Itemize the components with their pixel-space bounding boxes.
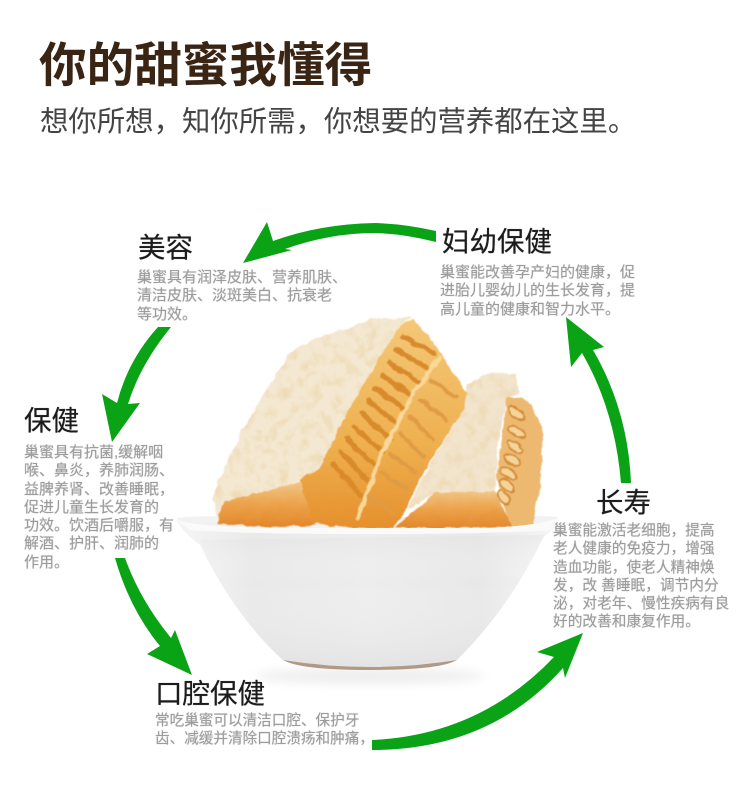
left comb: white top xyxy=(212,317,413,523)
bowl foot xyxy=(283,660,457,670)
heading: 长寿: 长寿 xyxy=(596,487,651,518)
arrow: 口腔保健 to 长寿 xyxy=(372,633,583,750)
left comb: ribs xyxy=(333,337,433,495)
arrow: 长寿 to 妇幼保健 xyxy=(566,317,631,483)
right comb: cell scallops xyxy=(495,404,527,506)
subtitle: 想你所想，知你所需，你想要的营养都在这里。 xyxy=(40,106,636,138)
left comb: ridge xyxy=(357,355,441,520)
panel: 长寿 xyxy=(553,487,729,630)
left comb: orange side xyxy=(300,318,467,529)
heading: 口腔保健: 口腔保健 xyxy=(155,678,265,709)
heading: 妇幼保健: 妇幼保健 xyxy=(442,226,552,257)
left comb: second rib column xyxy=(370,380,457,513)
bowl back rim xyxy=(176,516,558,530)
arrow: 保健 to 口腔保健 xyxy=(115,558,192,675)
bowl shadow xyxy=(255,668,485,684)
arrow: 美容 to 保健 xyxy=(102,327,171,442)
text: 妇幼保健 description: 巢蜜能改善孕产妇的健康，促 进胎儿婴幼儿的生长发育，提 高儿童的健康和智力水平。 xyxy=(440,264,635,318)
arrow: 妇幼保健 to 美容 xyxy=(243,222,436,263)
bowl rim highlight xyxy=(176,518,558,534)
panel: 美容 xyxy=(137,232,347,323)
right comb: bottom front xyxy=(395,490,512,529)
text: 保健 description: 巢蜜具有抗菌,缓解咽 喉、鼻炎，养肺润肠、 益脾养肾、改善睡眠， 促进儿童生长发育的 功效。饮酒后嚼服，有 解酒、护肝、润肺的 作用。 xyxy=(24,444,174,571)
bowl shading xyxy=(200,535,545,668)
bowl body xyxy=(176,518,558,668)
panel: 口腔保健 xyxy=(155,678,374,747)
right comb: white top xyxy=(407,373,518,510)
panel: 妇幼保健 xyxy=(440,226,635,318)
right comb: orange side xyxy=(497,397,543,528)
title: 你的甜蜜我懂得 xyxy=(39,40,372,93)
text: 长寿 description: 巢蜜能激活老细胞，提高 老人健康的免疫力，增强 造血功能，使老人精神焕 发，改 善睡眠，调节内分 泌，对老年、慢性疾病有良 好的改善和康复作用。 xyxy=(553,523,729,630)
heading: 保健: 保健 xyxy=(24,405,79,436)
honeycomb pieces xyxy=(212,317,543,529)
text: 美容 description: 巢蜜具有润泽皮肤、营养肌肤、 清洁皮肤、淡斑美白、抗衰老 等功效。 xyxy=(137,269,347,323)
heading: 美容: 美容 xyxy=(138,232,193,263)
left comb: bottom front xyxy=(217,482,315,527)
text: 口腔保健 description: 常吃巢蜜可以清洁口腔、保护牙 齿、减缓并清除口腔溃疡和肿痛， xyxy=(155,713,374,747)
panel: 保健 xyxy=(24,405,174,571)
